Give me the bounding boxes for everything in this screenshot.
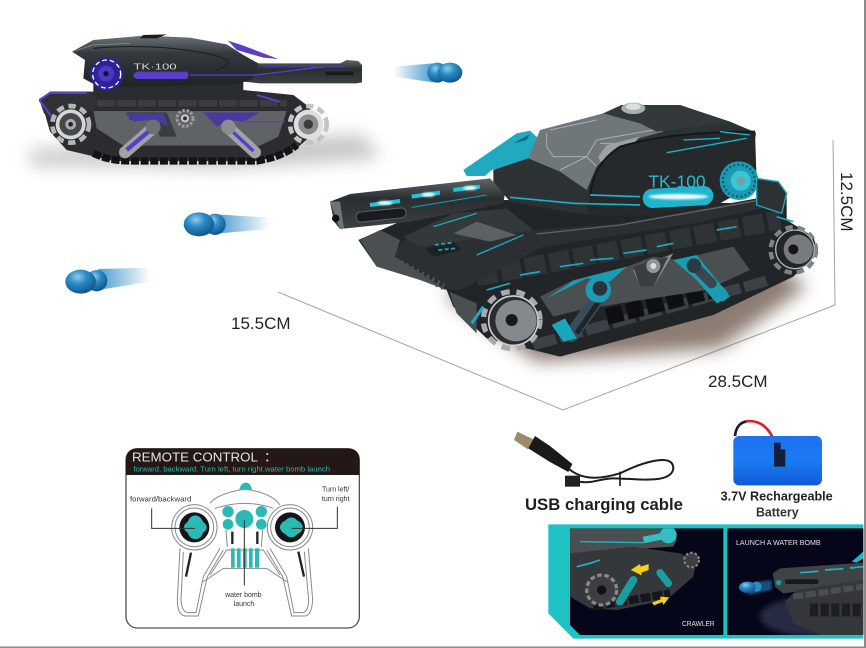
turret fin	[463, 131, 540, 176]
label: forward/backward: forward/backward	[130, 497, 191, 504]
barrel lights	[378, 186, 477, 205]
rear cog wheel	[52, 106, 89, 143]
turret shell curve	[587, 132, 757, 215]
yellow arrow bottom	[652, 597, 669, 605]
launch barrel crop	[773, 563, 863, 593]
label: water bomb launch	[224, 592, 262, 608]
front lever	[552, 277, 611, 342]
front cog wheel	[483, 292, 540, 348]
battery	[733, 421, 822, 485]
grip stripes	[231, 548, 259, 568]
purple tank shadow	[30, 135, 380, 168]
water bomb 3	[65, 268, 150, 294]
label: turn left/right: turn right	[322, 496, 350, 503]
panel frame	[126, 449, 359, 628]
dimension: length: 28.5CM	[708, 372, 768, 391]
blue tank	[330, 103, 818, 362]
launch water bomb	[748, 580, 772, 595]
floor dimension lines	[278, 140, 835, 410]
feature frame	[548, 524, 863, 639]
dimension: height: 12.5CM	[837, 172, 856, 232]
tank silhouette base	[358, 193, 818, 357]
lower tread blocks	[533, 280, 770, 345]
dimension: depth: 15.5CM	[231, 314, 291, 333]
side panel	[540, 247, 750, 317]
right purple lever	[221, 120, 255, 152]
purple fin	[228, 41, 278, 59]
rear deck	[39, 92, 97, 122]
yellow arrow top	[631, 564, 649, 575]
leader lines	[152, 507, 337, 586]
antenna button	[239, 483, 252, 490]
turret top panel	[528, 110, 663, 190]
centre gear	[633, 257, 668, 287]
front cog wheel	[290, 106, 327, 143]
upper track blocks	[477, 220, 780, 277]
crawler tank crop	[570, 527, 699, 610]
remote control panel	[126, 449, 359, 628]
rear armour	[757, 178, 787, 213]
cyan turret lines	[667, 132, 750, 153]
hull plate	[395, 198, 762, 290]
barrel	[330, 178, 505, 229]
usb caption: USB charging cable	[525, 495, 683, 514]
launch tracks crop	[785, 580, 863, 635]
buttons	[222, 506, 267, 530]
model badge: TK·100	[133, 61, 177, 71]
water bomb 2	[184, 212, 270, 236]
panel title: ：	[264, 450, 277, 465]
rear lever	[687, 258, 722, 295]
water bomb 1	[393, 63, 462, 83]
battery caption	[721, 490, 833, 520]
panel subtitle: forward, backward. Turn left, turn right.water bomb launch	[133, 467, 330, 474]
left side tread	[360, 230, 447, 290]
turret wheel	[90, 57, 123, 91]
turret	[493, 105, 757, 215]
turret wheel	[720, 161, 758, 200]
right joystick	[275, 512, 305, 542]
barrel	[243, 60, 362, 83]
feature: crawler	[570, 527, 723, 635]
label: water bomb launch: water bomb	[224, 592, 262, 599]
crawler label: CRAWLER	[682, 619, 715, 628]
controller body	[172, 489, 313, 616]
purple light bar	[133, 72, 188, 79]
rear cog wheel	[771, 227, 816, 273]
launch label: LAUNCH A WATER BOMB	[736, 538, 821, 547]
deck details	[403, 208, 533, 247]
feature: launch	[727, 528, 866, 637]
left purple lever	[125, 120, 161, 152]
cyan light bar	[642, 185, 714, 209]
purple tank	[30, 34, 462, 294]
slits	[186, 532, 304, 577]
turret dome	[603, 105, 730, 132]
battery caption: 3.7V Rechargeable	[721, 490, 833, 504]
hull side	[93, 111, 287, 146]
left joystick	[179, 512, 209, 542]
panel header	[126, 449, 359, 475]
tracks	[93, 145, 297, 161]
tank silhouette base	[39, 82, 323, 161]
panel title: REMOTE CONTROL	[132, 450, 258, 465]
label: turn left/right	[322, 487, 350, 503]
blue tank badge: TK-100	[648, 171, 706, 191]
label: water bomb launch: launch	[234, 601, 254, 608]
blue tank shadow	[447, 250, 807, 362]
battery caption: Battery	[756, 506, 799, 520]
label: turn left/right: Turn left/	[322, 487, 349, 494]
launch glow	[758, 597, 820, 635]
small hull gear	[177, 110, 193, 126]
usb cable	[514, 432, 673, 487]
turret	[72, 36, 258, 87]
accessories and feature panels	[514, 421, 866, 639]
cyan track accents	[487, 217, 793, 290]
